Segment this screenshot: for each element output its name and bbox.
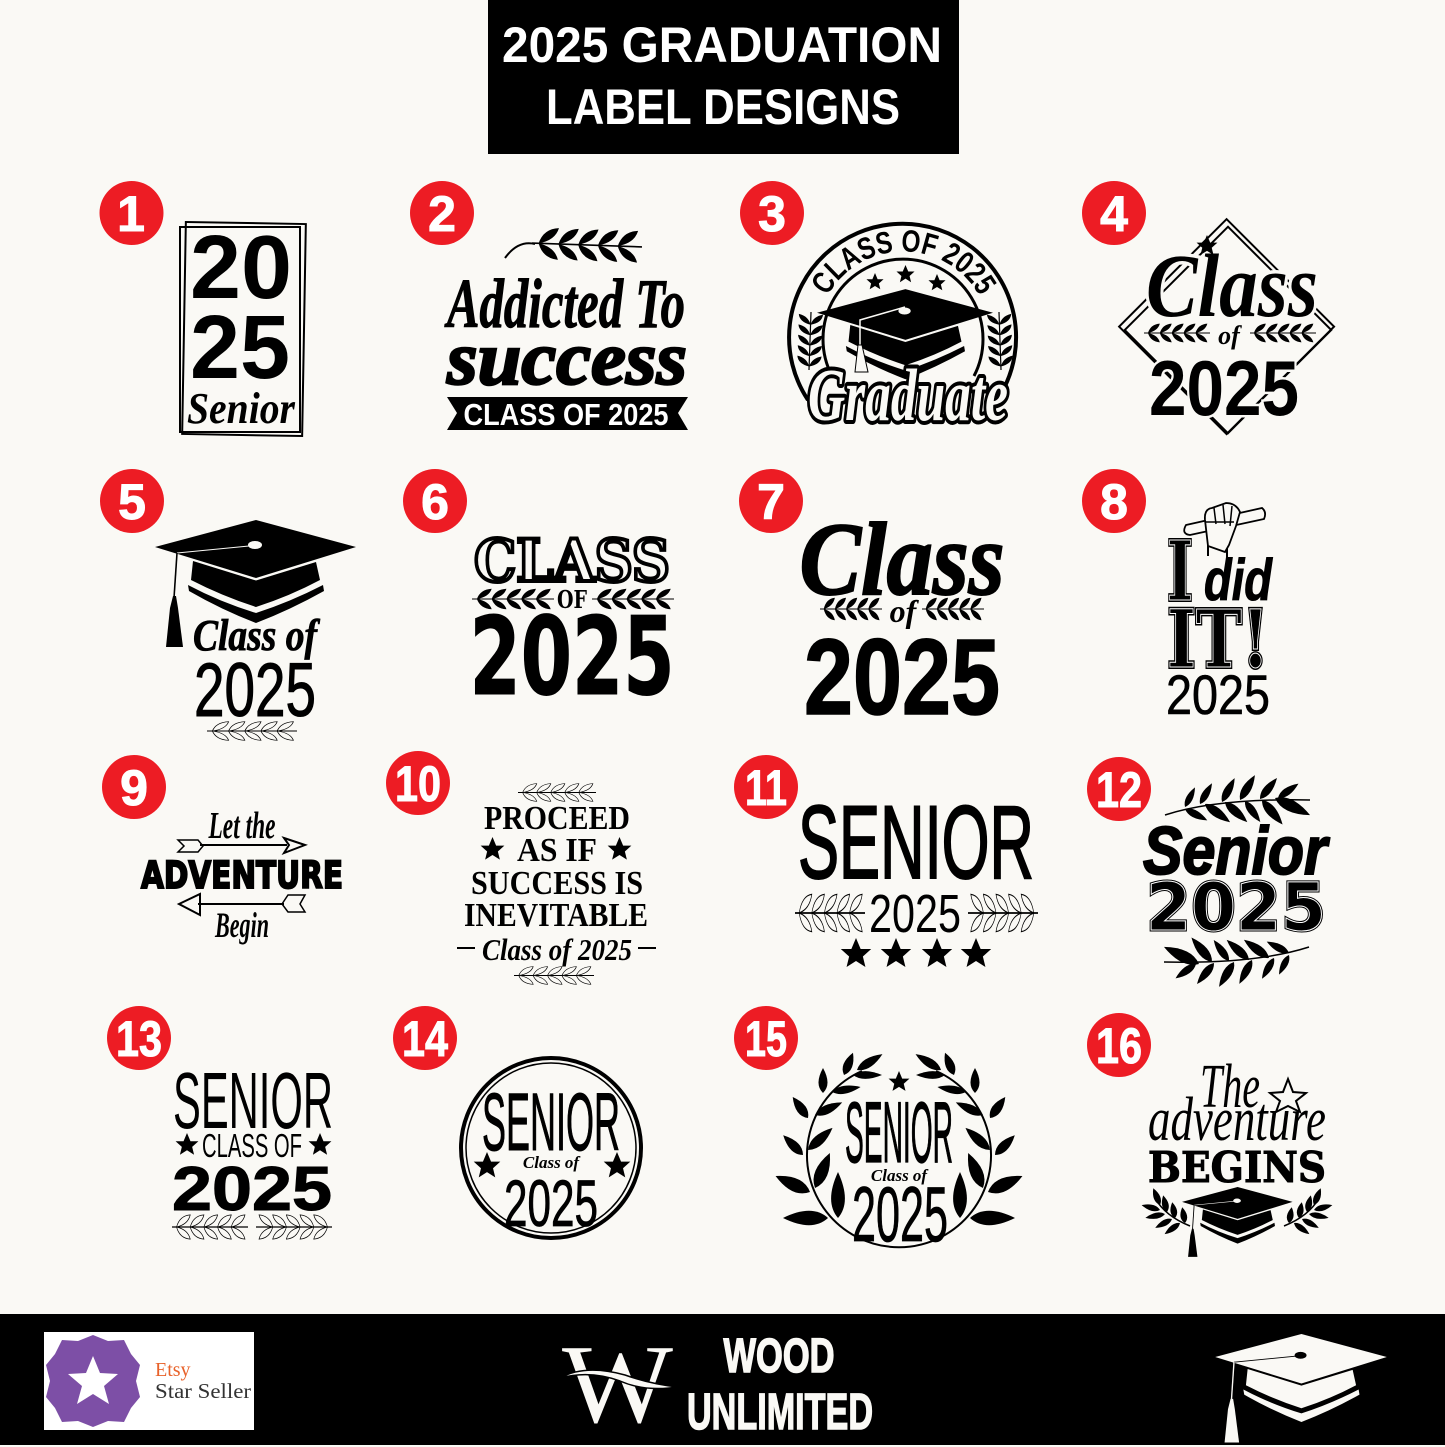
badge: number 2: 2 — [428, 186, 456, 242]
badge: number 15 — [734, 1006, 798, 1070]
design 15: Senior laurel wreath: 2025 — [852, 1170, 948, 1258]
design 8: I did it 2025: did — [1204, 548, 1273, 613]
design 13: Senior class of 2025: CLASS OF — [202, 1127, 302, 1164]
Wood Unlimited logo: W — [562, 1323, 673, 1447]
badge: number 3 — [740, 181, 804, 245]
design 10: Proceed as if success is inevitable: Class of 2025 — [482, 932, 632, 967]
design 7: script Class of 2025: Class — [800, 502, 1004, 617]
design 14: Senior circle: Class of — [523, 1153, 581, 1172]
badge: number 8 — [1082, 469, 1146, 533]
design 8: I did it 2025: IT! — [1167, 592, 1269, 686]
right laurel leaves — [913, 1050, 1025, 1225]
Etsy Star Seller badge — [44, 1332, 254, 1430]
badge: number 12: 12 — [1096, 762, 1142, 818]
title: 2025 GRADUATION — [502, 17, 942, 73]
badge: number 10: 10 — [395, 756, 441, 812]
design 16: The adventure begins: adventure — [1148, 1086, 1326, 1154]
badge: number 5: 5 — [118, 474, 146, 530]
badge: number 11: 11 — [745, 760, 787, 816]
badge: number 1: 1 — [117, 186, 145, 242]
design 5: cap Class of 2025: Class of — [193, 611, 321, 660]
design 4: Class of 2025 diamond — [1119, 219, 1334, 434]
badge: number 1 — [100, 181, 164, 245]
design 12: Senior 2025 wreath: Senior — [1143, 813, 1330, 889]
badge: number 4: 4 — [1100, 186, 1128, 242]
design 4: Class of 2025 diamond: 2025 — [1149, 344, 1299, 432]
badge: number 7: 7 — [757, 474, 785, 530]
design 12: Senior 2025 wreath: 2025 — [1146, 869, 1326, 946]
design 14: Senior circle — [461, 1058, 641, 1240]
design 6: varsity Class of 2025: OF — [557, 585, 587, 614]
badge: number 5 — [100, 469, 164, 533]
design 9: Let the adventure begin — [141, 805, 343, 945]
badge: number 2 — [410, 181, 474, 245]
badge: number 6: 6 — [421, 474, 449, 530]
title — [488, 0, 959, 154]
design 8: I did it 2025 — [1166, 503, 1273, 726]
design 3: Class of 2025 Graduate seal — [787, 222, 1018, 437]
badge: number 15: 15 — [745, 1011, 787, 1067]
design 11: Senior 2025 stars: 2025 — [869, 884, 961, 944]
design 10: Proceed as if success is inevitable: INEVITABLE — [464, 897, 648, 934]
design 15: Senior laurel wreath: SENIOR — [845, 1085, 953, 1181]
right leaf branch — [1284, 1187, 1333, 1237]
icon: top arrow — [178, 838, 305, 853]
design 9: Let the adventure begin: Begin — [214, 905, 269, 945]
design 13: Senior class of 2025: 2025 — [172, 1155, 332, 1224]
Etsy Star Seller badge: Star Seller — [155, 1379, 251, 1403]
design 2: Addicted to success: CLASS OF 2025 — [464, 397, 668, 432]
icon: bottom arrow — [179, 894, 305, 915]
design 14: Senior circle: SENIOR — [482, 1077, 620, 1168]
design 4: Class of 2025 diamond: Class — [1146, 237, 1318, 336]
design 3: Class of 2025 Graduate seal: Graduate — [808, 355, 1008, 437]
badge: number 7 — [739, 469, 803, 533]
design 4: Class of 2025 diamond: of — [1218, 321, 1242, 350]
badge: number 6 — [403, 469, 467, 533]
badge: number 8: 8 — [1100, 474, 1128, 530]
design 7: script Class of 2025 — [800, 502, 1004, 737]
design 14: Senior circle: 2025 — [504, 1166, 598, 1240]
badge: number 9: 9 — [120, 760, 148, 816]
badge: number 3: 3 — [758, 186, 786, 242]
badge: number 4 — [1082, 181, 1146, 245]
design 13: Senior class of 2025 — [172, 1056, 333, 1239]
design 1: 2025 Senior — [180, 218, 306, 436]
design 16: The adventure begins: The — [1200, 1053, 1260, 1121]
design 1: 2025 Senior: 20 — [190, 218, 292, 318]
design 13: Senior class of 2025: SENIOR — [173, 1056, 333, 1145]
badge: number 14: 14 — [402, 1011, 448, 1067]
design 16: The adventure begins — [1141, 1053, 1333, 1257]
design 6: varsity Class of 2025 — [470, 527, 674, 720]
design 6: varsity Class of 2025: CLASS — [474, 527, 670, 595]
design 2: Addicted to success — [444, 227, 688, 432]
design 2: Addicted to success: success — [446, 317, 687, 401]
design 8: I did it 2025: IT! — [1167, 592, 1269, 686]
design 10: Proceed as if success is inevitable — [457, 784, 656, 984]
design 7: script Class of 2025: 2025 — [804, 616, 1000, 737]
design 5: cap Class of 2025 — [155, 520, 356, 740]
title: LABEL DESIGNS — [546, 79, 900, 135]
badge: number 13: 13 — [116, 1011, 162, 1067]
design 2: Addicted to success: Addicted To — [444, 266, 685, 343]
design 10: Proceed as if success is inevitable: PROCEED — [484, 800, 630, 837]
design 3: Class of 2025 Graduate seal: CLASS OF 2025 — [813, 230, 997, 294]
bottom leaf branch — [1161, 934, 1309, 989]
design 1: 2025 Senior: 25 — [190, 298, 290, 398]
left laurel leaves — [773, 1050, 885, 1225]
icon: white graduation cap — [1215, 1334, 1387, 1442]
top leaf branch — [1165, 773, 1313, 828]
design 12: Senior 2025 wreath: 2025 — [1146, 869, 1326, 946]
design 8: I did it 2025: I — [1167, 524, 1193, 620]
design 7: script Class of 2025: of — [890, 593, 920, 629]
left leaf branch — [1141, 1187, 1190, 1237]
Etsy Star Seller badge: Etsy — [155, 1359, 191, 1381]
design 9: Let the adventure begin: Let the — [208, 805, 276, 847]
design 9: Let the adventure begin: ADVENTURE — [141, 854, 343, 897]
design 10: Proceed as if success is inevitable: SUCCESS IS — [471, 865, 643, 902]
badge: number 9 — [102, 755, 166, 819]
design 16: The adventure begins: BEGINS — [1148, 1143, 1326, 1192]
design 10: Proceed as if success is inevitable: AS IF — [517, 832, 597, 869]
Wood Unlimited logo: WOOD — [724, 1330, 834, 1383]
footer band — [0, 1314, 1445, 1447]
design 5: cap Class of 2025: 2025 — [194, 648, 316, 733]
design 15: Senior laurel wreath — [773, 1050, 1025, 1258]
Wood Unlimited logo — [560, 1323, 873, 1447]
design 11: Senior 2025 stars: SENIOR — [798, 785, 1034, 901]
icon: hand holding diploma — [1184, 503, 1265, 560]
design 15: Senior laurel wreath: Class of — [871, 1166, 929, 1185]
design 1: 2025 Senior: Senior — [187, 384, 296, 433]
design 8: I did it 2025: 2025 — [1166, 663, 1270, 726]
icon: outline star — [1270, 1079, 1306, 1112]
design 6: varsity Class of 2025: 2025 — [470, 595, 674, 720]
design 11: Senior 2025 stars — [795, 785, 1038, 967]
design 8: I did it 2025: I — [1167, 524, 1193, 620]
badge: number 16: 16 — [1096, 1018, 1142, 1074]
Wood Unlimited logo: UNLIMITED — [687, 1383, 873, 1440]
design 12: Senior 2025 wreath — [1143, 773, 1330, 989]
